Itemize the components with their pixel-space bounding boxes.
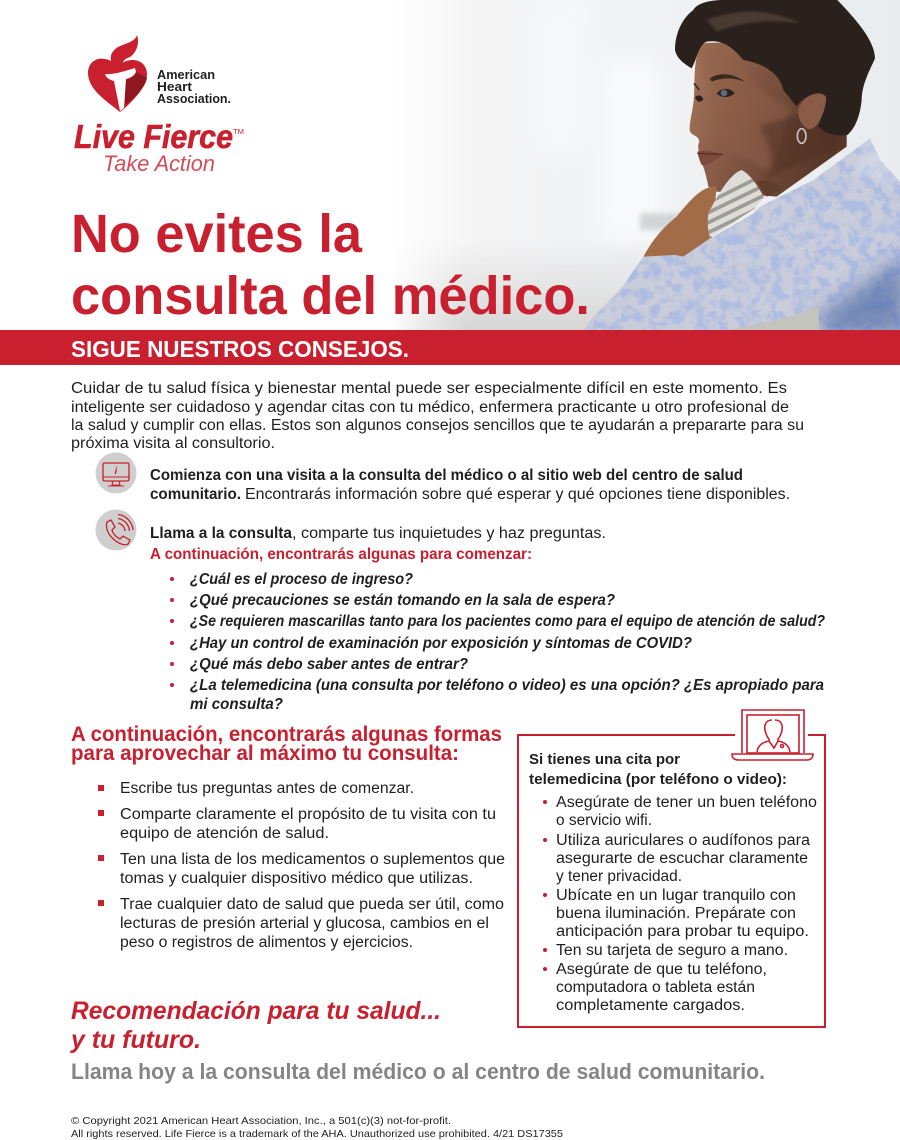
call to action: Llama hoy a la consulta del médico o al centro de salud comunitario. — [71, 1059, 765, 1084]
copyright footer: © Copyright 2021 American Heart Association, Inc., a 501(c)(3) not-for-profit. — [71, 1115, 451, 1127]
panel list: Utiliza auriculares o audífonos para — [556, 832, 810, 849]
mouth — [697, 151, 723, 165]
heading: make the most of your visit: A continuación, encontrarás algunas formas — [71, 723, 502, 746]
panel heading — [529, 751, 787, 788]
lower pillow — [723, 307, 819, 330]
banner — [0, 330, 900, 365]
tips list: lecturas de presión arterial y glucosa, cambios en el — [120, 915, 489, 932]
step one text — [150, 467, 790, 503]
step two text: A continuación, encontrarás algunas para comenzar: — [150, 546, 532, 563]
tips list: Ten una lista de los medicamentos o suplementos que — [120, 851, 505, 868]
Live Fierce wordmark — [74, 118, 244, 176]
question list: ¿Hay un control de examinación por exposición y síntomas de COVID? — [190, 635, 693, 652]
recommendation heading: Recomendación para tu salud... — [71, 997, 441, 1025]
icon: phone — [96, 510, 136, 550]
Live Fierce wordmark: TM — [233, 129, 244, 136]
panel list: asegurarte de escuchar claramente — [556, 850, 808, 867]
hair — [675, 0, 875, 135]
icon: heart and torch — [88, 35, 147, 112]
step two text: Llama a la consulta — [150, 525, 292, 542]
question list: mi consulta? — [190, 696, 284, 713]
question list: ¿Cuál es el proceso de ingreso? — [190, 571, 413, 588]
panel heading: telemedicina (por teléfono o video): — [529, 771, 787, 788]
banner: SIGUE NUESTROS CONSEJOS. — [71, 336, 409, 362]
title — [71, 204, 590, 326]
panel list: Asegúrate de tener un buen teléfono — [556, 794, 817, 811]
panel list: o servicio wifi. — [556, 812, 652, 829]
blouse — [584, 138, 900, 330]
logo wordmark: American — [157, 68, 215, 82]
tips list: peso o registros de alimentos y ejercicios. — [120, 934, 413, 951]
tips list: tomas y cualquier dispositivo médico que utilizas. — [120, 870, 473, 887]
face and neck — [690, 40, 847, 197]
panel heading: Si tienes una cita por — [529, 751, 680, 768]
pillow — [708, 170, 764, 238]
ear and earring — [798, 93, 826, 129]
tips list — [98, 780, 505, 951]
logo wordmark: Heart — [157, 80, 193, 94]
panel list: Ubícate en un lugar tranquilo con — [556, 887, 796, 904]
icon: computer monitor — [96, 452, 136, 494]
panel list: Ten su tarjeta de seguro a mano. — [556, 942, 788, 959]
logo wordmark — [157, 68, 231, 106]
step one text: Comienza con una visita a la consulta del médico o al sitio web del centro de salud — [150, 467, 743, 484]
panel list: anticipación para probar tu equipo. — [556, 923, 809, 940]
recommendation heading — [69, 997, 441, 1054]
step two text — [150, 525, 606, 563]
panel list: completamente cargados. — [556, 997, 745, 1014]
intro paragraph — [71, 380, 804, 452]
question list — [170, 571, 825, 713]
step one text: comunitario. — [150, 486, 241, 503]
panel list: computadora o tableta están — [556, 979, 755, 996]
intro paragraph: próxima visita al consultorio. — [71, 435, 275, 452]
tips list: Escribe tus preguntas antes de comenzar. — [120, 780, 414, 797]
intro paragraph: la salud y cumplir con ellas. Estos son algunos consejos sencillos que te ayudarán a prepararte para su — [71, 417, 804, 434]
question list: ¿Qué precauciones se están tomando en la sala de espera? — [190, 592, 616, 609]
title: No evites la — [71, 204, 363, 264]
Live Fierce wordmark: Take Action — [103, 151, 215, 176]
arm — [640, 187, 717, 263]
icon: computer monitor: i — [114, 466, 118, 477]
recommendation heading: y tu futuro. — [69, 1026, 201, 1054]
photo: woman looking out of a window — [390, 0, 900, 337]
question list: ¿La telemedicina (una consulta por teléfono o video) es una opción? ¿Es apropiado para — [190, 677, 824, 694]
logo: American Heart Association and Live Fierce — [74, 35, 244, 176]
title: consulta del médico. — [71, 266, 590, 326]
panel list: buena iluminación. Prepárate con — [556, 905, 796, 922]
panel list — [543, 794, 817, 1014]
intro paragraph: Cuidar de tu salud física y bienestar mental puede ser especialmente difícil en este momento. Es — [71, 380, 787, 397]
heading: make the most of your visit — [71, 723, 502, 765]
eyes and brows — [717, 89, 735, 97]
heading: make the most of your visit: para aprovechar al máximo tu consulta: — [71, 742, 459, 765]
panel list: y tener privacidad. — [556, 868, 682, 885]
tips list: Trae cualquier dato de salud que pueda ser útil, como — [120, 896, 504, 913]
question list: ¿Se requieren mascarillas tanto para los pacientes como para el equipo de atención de salud? — [190, 613, 825, 630]
panel list: Asegúrate de que tu teléfono, — [556, 961, 767, 978]
logo wordmark: Association. — [157, 92, 231, 106]
copyright footer — [71, 1115, 563, 1140]
question list: ¿Qué más debo saber antes de entrar? — [190, 656, 469, 673]
intro paragraph: inteligente ser cuidadoso y agendar citas con tu médico, enfermera practicante u otro profesional de — [71, 399, 789, 416]
tips list: Comparte claramente el propósito de tu visita con tu — [120, 806, 496, 823]
copyright footer: All rights reserved. Life Fierce is a trademark of the AHA. Unauthorized use prohibited. 4/21 DS17355 — [71, 1128, 563, 1140]
tips list: equipo de atención de salud. — [120, 825, 329, 842]
step two text: , comparte tus inquietudes y haz preguntas. — [292, 525, 606, 542]
step one text: Encontrarás información sobre qué esperar y qué opciones tiene disponibles. — [245, 486, 790, 503]
icon: laptop with doctor — [732, 710, 813, 760]
Live Fierce wordmark: Live Fierce — [74, 118, 233, 155]
panel: telemedicine — [518, 710, 825, 1027]
